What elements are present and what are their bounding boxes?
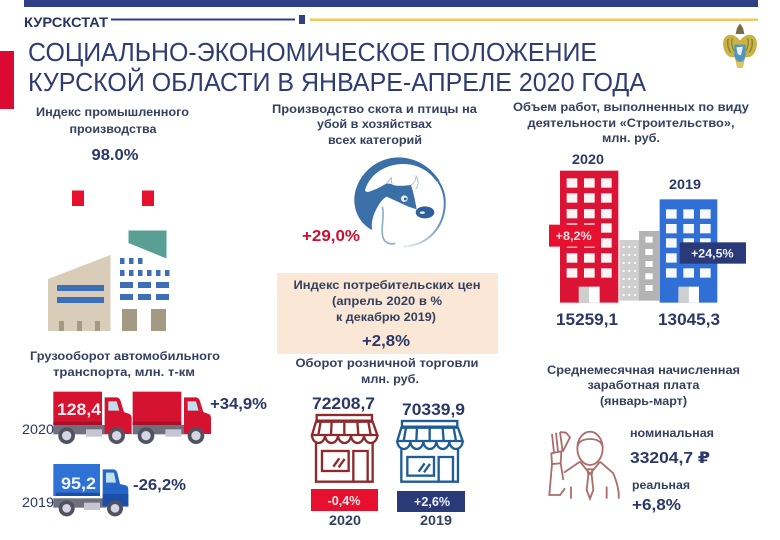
heading: consumer price index: к декабрю 2019) bbox=[336, 310, 436, 324]
heading: freight turnover: Грузооборот автомобильного bbox=[30, 349, 220, 363]
panel: livestock production bbox=[272, 102, 477, 247]
heading: construction: Объем работ, выполненных по виду bbox=[513, 100, 749, 114]
badge: -0,4% bbox=[311, 489, 378, 511]
value: +34,9%: +34,9% bbox=[210, 396, 267, 413]
red building 2020 bbox=[560, 171, 618, 303]
icon: blue truck bbox=[53, 464, 128, 516]
icon: coat of arms bbox=[723, 23, 757, 68]
value: 128,4: 128,4 bbox=[57, 400, 102, 419]
organisation name: КУРСКСТАТ bbox=[24, 14, 108, 30]
heading: industrial production bbox=[36, 105, 189, 136]
panel: consumer price index bbox=[277, 273, 498, 354]
badge: +8,2%: +8,2% bbox=[556, 229, 592, 243]
heading: average wage bbox=[547, 363, 740, 408]
value: +2,8%: +2,8% bbox=[362, 333, 410, 350]
heading: retail turnover: Оборот розничной торговли bbox=[296, 356, 478, 370]
year label: 2019: 2019 bbox=[420, 512, 452, 528]
red truck two bbox=[133, 392, 211, 444]
red side marker bbox=[0, 51, 14, 109]
heading: retail turnover: млн. руб. bbox=[361, 372, 419, 386]
red truck one bbox=[53, 392, 132, 444]
value: +29,0%: +29,0% bbox=[302, 228, 360, 245]
value: 33204,7 rub: 33204,7 ₽ bbox=[630, 450, 710, 467]
value: +6,8%: +6,8% bbox=[632, 497, 681, 514]
heading: industrial production: производства bbox=[70, 122, 157, 136]
heading: retail turnover bbox=[296, 356, 478, 386]
badge: +2,6% bbox=[397, 491, 465, 512]
heading: freight turnover: транспорта, млн. т-км bbox=[53, 365, 195, 379]
background grey buildings bbox=[619, 231, 659, 301]
year labels: 2020 and 2019: 2020 bbox=[572, 151, 604, 167]
header band bbox=[24, 0, 758, 30]
label: real: реальная bbox=[632, 478, 690, 492]
icon: factory bbox=[48, 190, 170, 331]
value: 72208,7: 72208,7 bbox=[312, 394, 375, 413]
heading: construction: деятельности «Строительство», bbox=[528, 116, 734, 130]
badge: +24,5%: +24,5% bbox=[691, 247, 734, 261]
heading: livestock production: Производство скота и птицы на bbox=[272, 102, 477, 116]
year label: 2020: 2020 bbox=[22, 421, 54, 437]
panel: freight turnover bbox=[22, 349, 267, 516]
badge: +24,5% bbox=[680, 242, 746, 264]
panel: industrial production bbox=[36, 105, 189, 331]
badge: +2,6%: +2,6% bbox=[414, 495, 450, 509]
heading: freight turnover bbox=[30, 349, 220, 379]
badge: +8,2% bbox=[549, 225, 601, 247]
value: 98.0%: 98.0% bbox=[92, 147, 138, 164]
heading: average wage: (январь-март) bbox=[600, 394, 687, 408]
panel: construction bbox=[513, 100, 749, 329]
values: construction volume: 15259,1 bbox=[556, 310, 618, 329]
heading: average wage: заработная плата bbox=[588, 378, 700, 392]
icon: red shop bbox=[312, 415, 377, 482]
icon: man holding banknotes bbox=[549, 432, 619, 499]
heading: construction: млн. руб. bbox=[602, 131, 660, 145]
heading: livestock production: убой в хозяйствах bbox=[317, 117, 432, 131]
heading: livestock production: всех категорий bbox=[328, 133, 422, 147]
value: -26,2%: -26,2% bbox=[133, 477, 186, 494]
label: nominal: номинальная bbox=[630, 426, 714, 440]
value: 95,2: 95,2 bbox=[61, 474, 96, 493]
heading: livestock production bbox=[272, 102, 477, 147]
title: КУРСКОЙ ОБЛАСТИ В ЯНВАРЕ-АПРЕЛЕ 2020 ГОДА bbox=[28, 67, 647, 97]
badge: -0,4%: -0,4% bbox=[328, 494, 360, 508]
value: 70339,9: 70339,9 bbox=[402, 400, 465, 419]
icon: red trucks bbox=[53, 392, 211, 444]
panel: retail turnover bbox=[296, 356, 478, 528]
heading: consumer price index: (апрель 2020 в % bbox=[332, 294, 442, 308]
chart: building comparison bbox=[549, 171, 746, 303]
panel: average wage bbox=[547, 363, 740, 514]
icon: blue shop bbox=[397, 421, 463, 482]
icon: cow in circle bbox=[354, 157, 445, 247]
title bbox=[28, 37, 647, 97]
heading: average wage: Среднемесячная начисленная bbox=[547, 363, 740, 377]
heading: consumer price index: Индекс потребительских цен bbox=[294, 278, 480, 292]
heading: consumer price index bbox=[294, 278, 480, 324]
year label: 2020: 2020 bbox=[329, 512, 361, 528]
values: construction volume: 13045,3 bbox=[658, 310, 720, 329]
values: construction volume bbox=[556, 310, 720, 329]
year labels: 2020 and 2019: 2019 bbox=[669, 176, 701, 192]
title: СОЦИАЛЬНО-ЭКОНОМИЧЕСКОЕ ПОЛОЖЕНИЕ bbox=[28, 37, 597, 67]
heading: construction bbox=[513, 100, 749, 145]
blue building 2019 bbox=[660, 199, 717, 303]
heading: industrial production: Индекс промышленного bbox=[36, 105, 189, 119]
year label: 2019: 2019 bbox=[22, 494, 54, 510]
year labels: 2020 and 2019 bbox=[572, 151, 701, 192]
